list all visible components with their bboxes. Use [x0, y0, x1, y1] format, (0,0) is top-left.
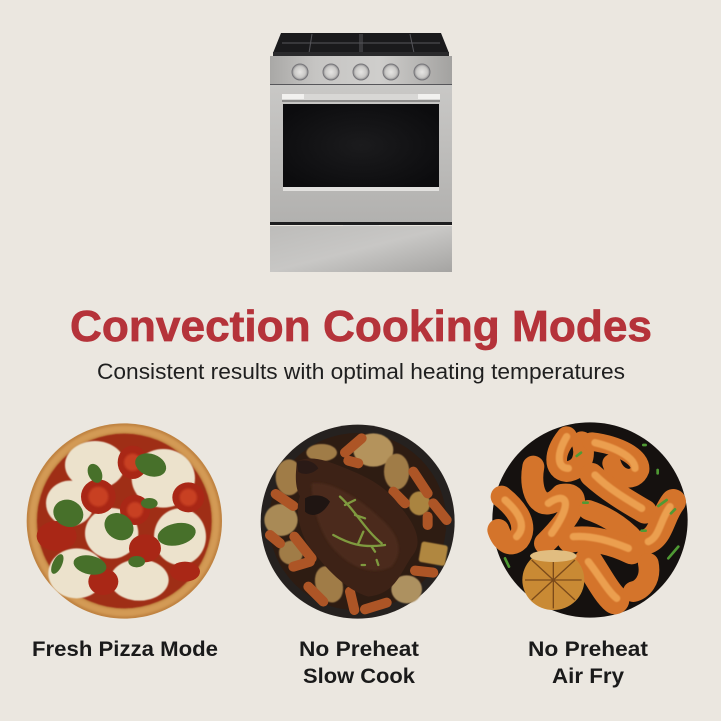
thyme sprig: [333, 497, 385, 565]
title: Convection Cooking Modes: [70, 302, 652, 351]
food image: slow cooked pot roast: [261, 425, 455, 619]
shrimp: [498, 437, 673, 600]
oven door: [270, 85, 452, 222]
label: no preheat slow cook: No Preheat: [299, 637, 419, 661]
roasted garlic: [522, 550, 584, 610]
oven window: [283, 104, 439, 187]
label: no preheat air fry: Air Fry: [552, 664, 624, 688]
carrots: [270, 438, 447, 610]
tomato slices: [37, 446, 204, 595]
label: no preheat air fry: No Preheat: [528, 637, 648, 661]
storage drawer: [270, 226, 452, 272]
icon: stainless steel range oven: [270, 33, 452, 272]
label: no preheat air fry: [528, 637, 648, 688]
mozzarella: [46, 441, 206, 601]
sauce: [37, 434, 212, 608]
beef roast: [296, 459, 418, 597]
food image: air fried shrimp: [492, 422, 688, 618]
herbs: [505, 445, 678, 567]
skillet: [492, 422, 688, 618]
control knobs: [292, 64, 430, 80]
basil leaves: [49, 449, 198, 578]
subtitle: Consistent results with optimal heating temperatures: [97, 359, 625, 384]
pot: [261, 425, 455, 619]
food image: fresh pizza: [27, 423, 222, 619]
door handle: [282, 94, 440, 102]
crust: [27, 423, 222, 619]
potatoes: [264, 433, 448, 606]
label: no preheat slow cook: Slow Cook: [303, 664, 415, 688]
cooktop grates: [273, 33, 449, 53]
shrimp highlights: [505, 437, 670, 598]
label: fresh pizza mode: Fresh Pizza Mode: [32, 637, 218, 661]
label: no preheat slow cook: [299, 637, 419, 688]
control panel: [270, 56, 452, 84]
